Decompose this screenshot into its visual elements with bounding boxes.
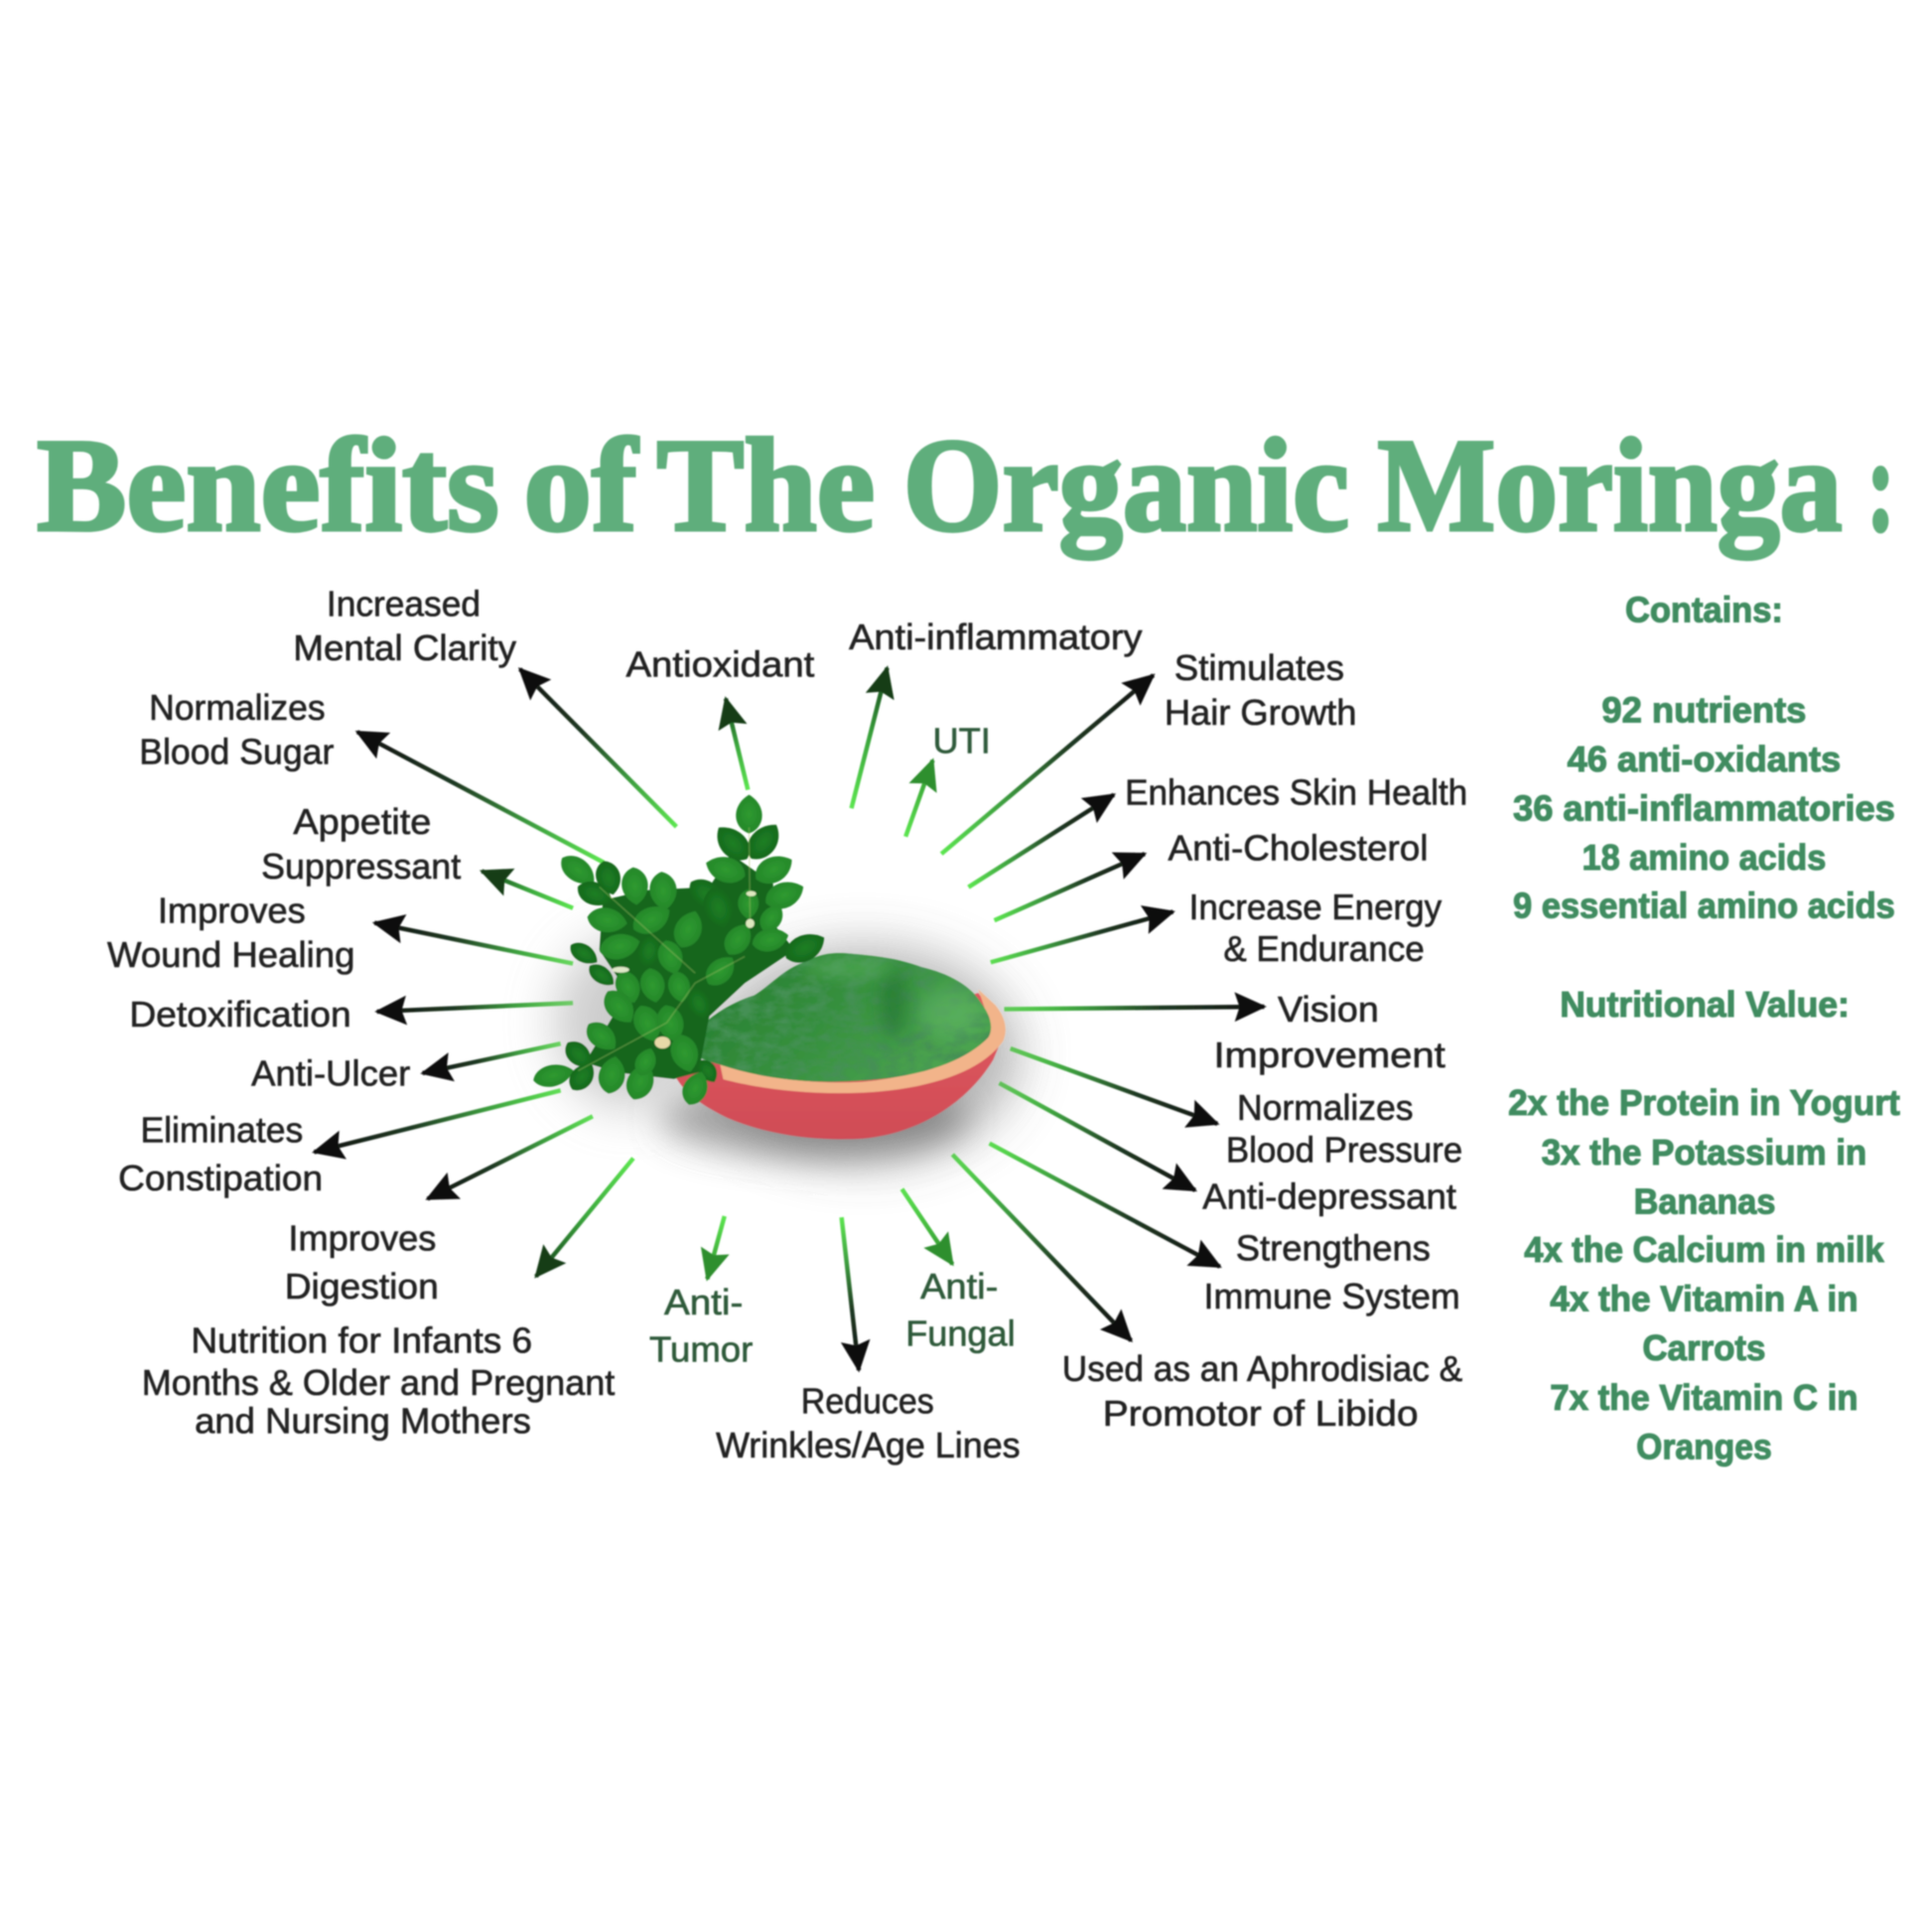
label: vision improvement	[1213, 989, 1446, 1075]
label: increase energy	[1189, 887, 1442, 969]
label: eliminates constipation: Eliminates	[140, 1109, 303, 1150]
label: reduces wrinkles: Reduces	[801, 1381, 934, 1422]
list: nutritional value: Oranges	[1636, 1426, 1772, 1466]
label: improves digestion	[285, 1218, 439, 1307]
list: nutritional value: 4x the Calcium in milk	[1524, 1229, 1885, 1270]
label: vision improvement: Improvement	[1213, 1035, 1446, 1075]
list: contents: 36 anti-inflammatories	[1513, 788, 1895, 829]
label: anti-depressant: Anti-depressant	[1202, 1175, 1456, 1216]
label: aphrodisiac: Used as an Aphrodisiac &	[1062, 1348, 1462, 1389]
label: improves wound healing: Improves	[158, 891, 306, 931]
label: normalizes blood pressure	[1226, 1087, 1462, 1170]
label: increase energy: & Endurance	[1223, 928, 1425, 969]
heading: contains: Contains:	[1625, 590, 1783, 630]
label: appetite suppressant	[261, 801, 461, 887]
title: Organic	[903, 412, 1349, 560]
arrow: energy	[991, 911, 1173, 962]
arrow: wound healing	[374, 923, 573, 964]
label: strengthens immune system: Strengthens	[1236, 1228, 1431, 1269]
label: nutrition for infants: Months & Older and Pregnant	[142, 1362, 615, 1403]
label: anti-tumor	[649, 1282, 753, 1369]
label: reduces wrinkles: Wrinkles/Age Lines	[716, 1425, 1021, 1465]
label: appetite suppressant: Suppressant	[261, 846, 461, 887]
list: nutritional value: 4x the Vitamin A in	[1550, 1278, 1859, 1318]
label: antioxidant: Antioxidant	[625, 643, 814, 684]
label: enhances skin health: Enhances Skin Health	[1125, 771, 1467, 812]
label: anti-tumor: Anti-	[664, 1282, 743, 1322]
label: UTI: UTI	[932, 720, 991, 760]
label: stimulates hair growth: Stimulates	[1174, 647, 1344, 688]
arrow: hair growth	[941, 675, 1154, 854]
arrow: vision	[1004, 1007, 1264, 1009]
labels: top and bottom	[625, 617, 1142, 1465]
label: improves digestion: Digestion	[285, 1266, 439, 1307]
list: contents: 92 nutrients	[1601, 689, 1806, 730]
label: anti-tumor: Tumor	[649, 1328, 753, 1369]
list: contents	[1513, 689, 1895, 926]
leaflets: lower frond	[530, 938, 722, 1108]
list: nutritional value	[1508, 1082, 1900, 1466]
arrow: anti-fungal	[901, 1189, 952, 1264]
list: contents: 18 amino acids	[1583, 837, 1826, 878]
labels: left side	[107, 584, 615, 1441]
title: The	[656, 412, 875, 559]
panel: contains and nutritional value	[1508, 590, 1900, 1466]
powder mound	[690, 953, 991, 1082]
leaflets: right frond	[654, 918, 831, 992]
title: Moringa	[1378, 412, 1842, 560]
list: nutritional value: 7x the Vitamin C in	[1550, 1377, 1859, 1418]
bowl of moringa powder	[670, 953, 1006, 1139]
arrows radiating from the bowl	[314, 668, 1264, 1370]
arrow: anti-depressant	[1000, 1083, 1195, 1190]
label: normalizes blood sugar: Normalizes	[149, 687, 326, 728]
label: improves wound healing	[107, 891, 354, 975]
label: appetite suppressant: Appetite	[293, 801, 431, 842]
arrow: mental clarity	[520, 669, 676, 827]
label: improves wound healing: Wound Healing	[107, 934, 354, 975]
label: anti-ulcer: Anti-Ulcer	[251, 1052, 410, 1093]
arrow: UTI	[905, 760, 932, 837]
leaf cluster base	[585, 854, 794, 1079]
title: Benefits	[37, 412, 499, 559]
list: nutritional value: Bananas	[1634, 1180, 1775, 1221]
label: reduces wrinkles	[716, 1381, 1021, 1465]
arrow: anti-ulcer	[423, 1043, 561, 1073]
label: stimulates hair growth	[1165, 647, 1356, 733]
label: stimulates hair growth: Hair Growth	[1165, 692, 1356, 733]
heading: nutritional value: Nutritional Value:	[1560, 984, 1850, 1025]
label: anti-inflammatory: Anti-inflammatory	[849, 617, 1142, 657]
arrow: skin health	[968, 794, 1114, 888]
leaflets: left frond	[554, 849, 708, 968]
arrow: immune system	[990, 1144, 1220, 1267]
label: eliminates constipation	[118, 1109, 323, 1198]
arrow: antioxidant	[726, 699, 748, 790]
label: normalizes blood pressure: Normalizes	[1237, 1087, 1414, 1128]
label: nutrition for infants: Nutrition for Infants 6	[191, 1320, 532, 1361]
label: detoxification: Detoxification	[129, 994, 351, 1035]
leaflets: top frond	[682, 795, 809, 936]
label: anti-fungal	[905, 1266, 1016, 1353]
list: nutritional value: Carrots	[1642, 1327, 1765, 1368]
bowl rim	[720, 990, 1006, 1093]
list: nutritional value: 3x the Potassium in	[1542, 1132, 1866, 1173]
title: of	[523, 412, 638, 559]
arrow: blood pressure	[1011, 1048, 1217, 1124]
arrow: constipation	[314, 1090, 561, 1152]
list: contents: 9 essential amino acids	[1513, 886, 1895, 926]
arrow: appetite	[482, 871, 573, 908]
arrow: digestion	[428, 1116, 593, 1199]
labels: right side	[1062, 647, 1467, 1434]
title	[37, 412, 1895, 560]
label: increased mental clarity: Mental Clarity	[293, 627, 516, 668]
label: improves digestion: Improves	[288, 1218, 436, 1259]
bowl body	[670, 993, 1006, 1139]
title: :	[1866, 412, 1895, 559]
label: anti-cholesterol: Anti-Cholesterol	[1169, 827, 1428, 868]
label: strengthens immune system	[1204, 1228, 1460, 1316]
arrow: aphrodisiac	[952, 1155, 1131, 1340]
arrow: anti-tumor	[707, 1216, 725, 1279]
arrow: cholesterol	[995, 854, 1145, 920]
label: anti-fungal: Fungal	[905, 1312, 1016, 1353]
arrow: blood sugar	[357, 732, 604, 863]
label: increased mental clarity: Increased	[327, 584, 481, 624]
label: anti-fungal: Anti-	[920, 1266, 998, 1307]
arrow: wrinkles	[842, 1217, 859, 1370]
label: aphrodisiac: Promotor of Libido	[1103, 1393, 1418, 1434]
label: normalizes blood sugar: Blood Sugar	[139, 731, 334, 771]
list: contents: 46 anti-oxidants	[1568, 739, 1841, 779]
label: normalizes blood sugar	[139, 687, 334, 771]
label: aphrodisiac	[1062, 1348, 1462, 1434]
arrow: infants	[536, 1159, 633, 1277]
arrow: detoxification	[377, 1003, 573, 1012]
label: nutrition for infants	[142, 1320, 615, 1441]
label: vision improvement: Vision	[1278, 989, 1379, 1030]
moringa leaves	[530, 795, 831, 1108]
arrow: anti-inflammatory	[852, 668, 888, 808]
bowl shadow	[554, 936, 1021, 1162]
label: eliminates constipation: Constipation	[118, 1158, 323, 1198]
list: nutritional value: 2x the Protein in Yogurt	[1508, 1082, 1900, 1123]
label: nutrition for infants: and Nursing Mothers	[195, 1400, 531, 1441]
label: normalizes blood pressure: Blood Pressure	[1226, 1129, 1462, 1170]
label: increased mental clarity	[293, 584, 516, 668]
label: strengthens immune system: Immune System	[1204, 1276, 1460, 1316]
leaf stems and highlights	[578, 827, 757, 1070]
label: increase energy: Increase Energy	[1189, 887, 1442, 927]
